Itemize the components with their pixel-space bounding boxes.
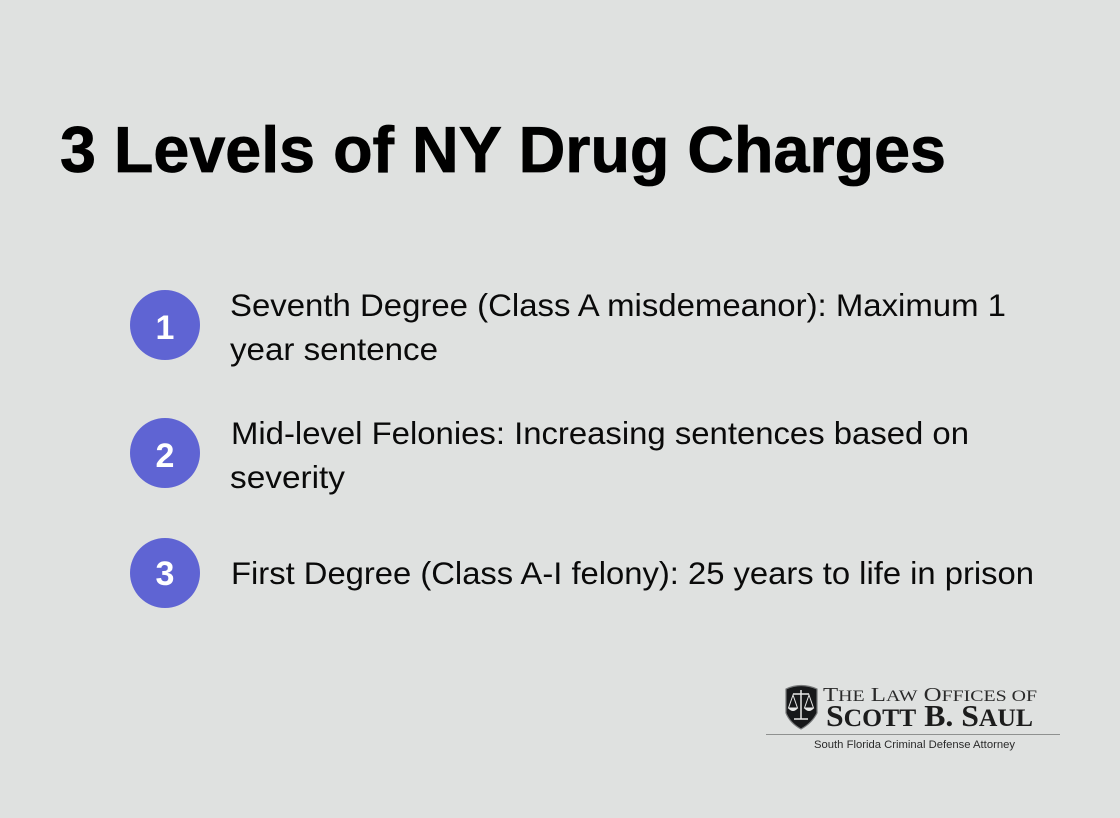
- title: 3 Levels of NY Drug Charges: [60, 113, 946, 186]
- number badge 1: [130, 290, 200, 360]
- item 1 text: [230, 287, 1006, 367]
- logo divider: [766, 734, 1060, 735]
- firm name line 1: THE L AW O FFICES OF: [823, 684, 1037, 706]
- number badge 2: 2: [156, 437, 174, 475]
- item 2 text: Mid-level Felonies: Increasing sentences based on: [231, 415, 969, 451]
- number badge 1: 1: [156, 309, 174, 347]
- list item 1: [130, 287, 1006, 367]
- item 1 text: year sentence: [230, 331, 438, 367]
- firm tagline: South Florida Criminal Defense Attorney: [814, 739, 1016, 751]
- number badge 3: 3: [156, 555, 174, 593]
- item 3 text: First Degree (Class A-I felony): 25 years to life in prison: [231, 555, 1034, 591]
- item 2 text: [230, 415, 969, 495]
- number badge 2: [130, 418, 200, 488]
- item 2 text: severity: [230, 459, 345, 495]
- firm name line 2: SCOTT B. SAUL: [826, 698, 1033, 733]
- icon: shield with scales: [786, 686, 817, 729]
- list item 2: [130, 415, 969, 495]
- number badge 3: [130, 538, 200, 608]
- list item 3: [130, 538, 1034, 608]
- item 1 text: Seventh Degree (Class A misdemeanor): Maximum 1: [230, 287, 1006, 323]
- law firm logo: [766, 684, 1060, 751]
